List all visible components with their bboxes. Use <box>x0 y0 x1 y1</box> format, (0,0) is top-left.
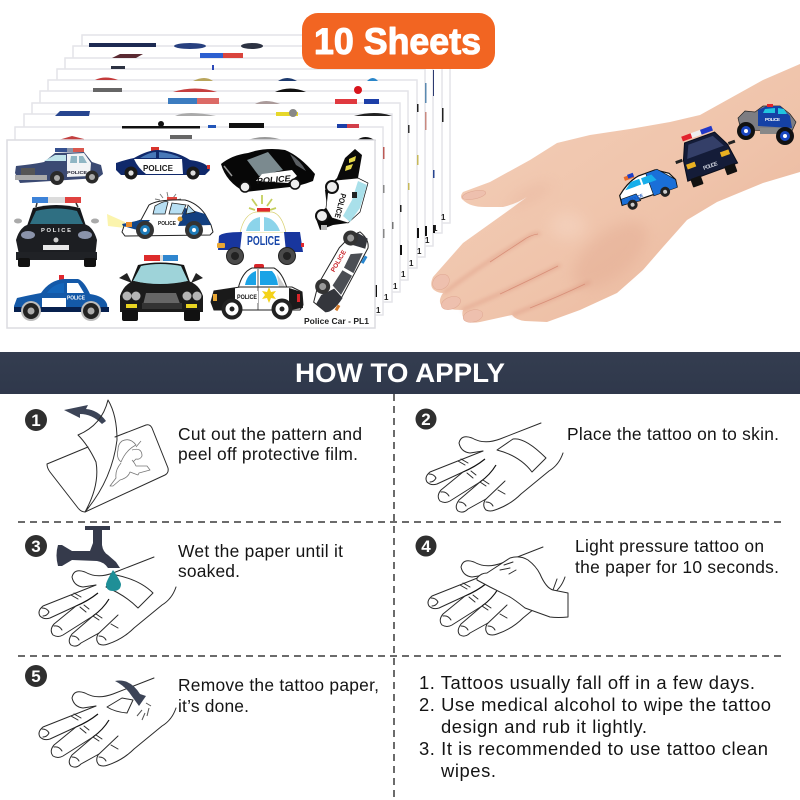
peeking right edges on back sheets: 1 <box>409 259 414 268</box>
number badge 2: 2 <box>421 410 431 429</box>
step 3 <box>25 526 343 646</box>
peeking car tops on back sheets <box>55 43 392 141</box>
step 4 text <box>575 536 779 577</box>
step 1 text: peel off protective film. <box>178 444 358 464</box>
number badge 3 <box>25 535 47 557</box>
step 5 text: Remove the tattoo paper, <box>178 675 379 695</box>
peeking right edges on back sheets <box>375 70 446 315</box>
step 4 text: Light pressure tattoo on <box>575 536 764 556</box>
number badge 1: 1 <box>31 411 41 430</box>
peeking right edges on back sheets: 1 <box>417 247 422 256</box>
car sticker: black front cartoon police car <box>119 255 203 321</box>
step 4 <box>416 536 779 636</box>
step 1 text: Cut out the pattern and <box>178 424 362 444</box>
step 5 text <box>178 675 379 716</box>
icon: removing paper <box>39 678 176 767</box>
icon: pressing hand <box>428 547 568 636</box>
notes list: design and rub it lightly. <box>441 716 647 737</box>
notes list: 3. It is recommended to use tattoo clean <box>419 738 768 759</box>
notes list <box>419 672 771 781</box>
step 2 text: Place the tattoo on to skin. <box>567 424 779 444</box>
number badge 5 <box>25 665 47 687</box>
step 3 text <box>178 541 343 581</box>
step 4 text: the paper for 10 seconds. <box>575 557 779 577</box>
car sticker: blue and white cartoon police car <box>217 195 304 264</box>
car sticker: old navy police car: POLICE <box>67 170 87 175</box>
step 5 <box>25 665 379 767</box>
car sticker: rotated grey police car <box>306 226 377 317</box>
tattoo: monster truck <box>737 104 796 145</box>
peeking right edges on back sheets: 1 <box>376 306 381 315</box>
step 2 <box>416 408 779 512</box>
heading bar: HOW TO APPLY: HOW TO APPLY <box>295 358 505 388</box>
car sticker: black front view police car <box>14 197 99 267</box>
step 3 text: Wet the paper until it <box>178 541 343 561</box>
number badge 4: 4 <box>421 537 431 556</box>
car sticker: black front view police car: POLICE <box>41 228 71 234</box>
number badge 4 <box>416 536 436 556</box>
number badge 1 <box>25 409 47 431</box>
front sheet <box>7 140 375 328</box>
badge: 10 Sheets: 10 Sheets <box>314 21 481 62</box>
car sticker: rotated grey police car: POLICE <box>330 249 348 273</box>
car sticker: black and white cartoon police car <box>211 264 303 320</box>
car sticker: navy side police car <box>116 147 210 180</box>
notes list: 1. Tattoos usually fall off in a few days. <box>419 672 755 693</box>
car sticker: white cartoon police car with headlight beam <box>107 192 213 239</box>
icon: peeling film with unicorn <box>47 400 168 512</box>
icon: tattoo on hand <box>426 423 563 512</box>
car sticker: black sports police car <box>221 149 315 192</box>
step 1 <box>25 400 362 512</box>
number badge 2 <box>416 408 436 430</box>
notes list: 2. Use medical alcohol to wipe the tattoo <box>419 694 771 715</box>
peeking right edges on back sheets: 1 <box>433 224 438 233</box>
car sticker: blue side police car: POLICE <box>67 296 85 302</box>
car sticker: blue and white cartoon police car: POLICE <box>247 233 280 248</box>
car sticker: black and white cartoon police car: POLICE <box>237 294 258 301</box>
photo: hand and wrist with tattoos <box>430 64 800 324</box>
car sticker: navy side police car: POLICE <box>143 163 173 173</box>
grid dividers <box>18 394 782 798</box>
peeking right edges on back sheets: 1 <box>384 293 389 302</box>
step 5 text: it’s done. <box>178 696 249 716</box>
hand shading <box>506 178 659 301</box>
tattoo: blue police car: POLICE <box>629 193 644 202</box>
step 3 text: soaked. <box>178 561 240 581</box>
step 1 text <box>178 424 362 464</box>
notes list: wipes. <box>440 760 496 781</box>
tattoo: blue police car <box>613 160 680 213</box>
finger separations <box>444 234 590 315</box>
tattoo: monster truck: POLICE <box>765 117 780 122</box>
panel: stack of 10 tattoo sheets <box>7 35 450 328</box>
car sticker: black sports police car: POLICE <box>256 173 291 186</box>
peeking right edges on back sheets: 1 <box>441 213 446 222</box>
heading bar: HOW TO APPLY <box>0 352 800 394</box>
peeking right edges on back sheets: 1 <box>425 236 430 245</box>
car sticker: old navy police car <box>15 148 103 185</box>
car sticker: white cartoon police car with headlight beam: POLICE <box>158 221 176 227</box>
peeking right edges on back sheets: 1 <box>393 282 398 291</box>
number badge 3: 3 <box>31 537 41 556</box>
tattoo: navy police car front <box>668 120 745 190</box>
peeking right edges on back sheets: 1 <box>401 270 406 279</box>
icon: tap wetting hand <box>39 526 176 646</box>
badge: 10 Sheets <box>302 13 495 69</box>
sheet code label: Police Car - PL1 <box>304 316 369 326</box>
tattoo: navy police car front: POLICE <box>703 161 719 172</box>
car sticker: rotated black and white police car: POLICE <box>332 192 348 219</box>
number badge 5: 5 <box>31 667 41 686</box>
car sticker: blue side police car <box>14 275 109 321</box>
car sticker: rotated black and white police car <box>315 149 368 230</box>
